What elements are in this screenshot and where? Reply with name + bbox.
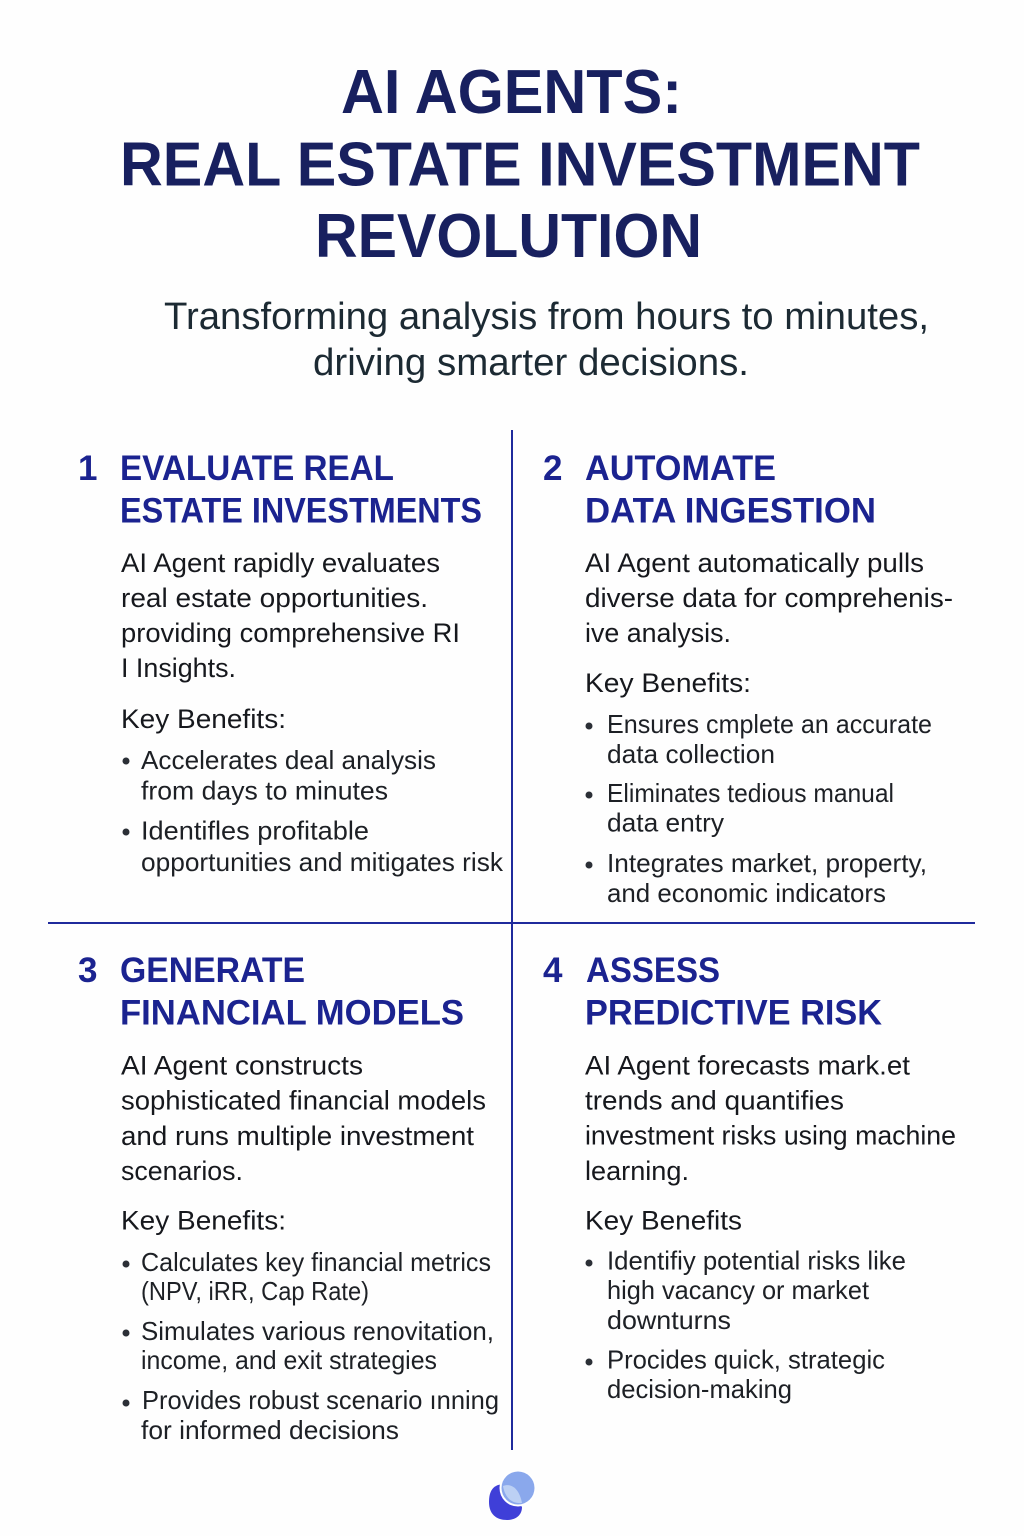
- benefits list: high vacancy or market: [607, 1275, 870, 1305]
- description: AI Agent automatically pulls: [585, 548, 924, 578]
- benefits list: [122, 745, 504, 877]
- subtitle: [164, 296, 929, 384]
- heading: evaluate: ESTATE INVESTMENTS: [120, 492, 482, 530]
- number 2: 2: [543, 449, 562, 488]
- benefits list: opportunities and mitigates risk: [141, 847, 504, 877]
- benefits list: Identifles profitable: [141, 816, 369, 846]
- description: scenarios.: [121, 1156, 243, 1186]
- heading: assess: PREDICTIVE RISK: [585, 994, 882, 1032]
- description: sophisticated financial models: [121, 1086, 486, 1116]
- benefits list: (NPV, iRR, Cap Rate): [141, 1276, 369, 1306]
- title: REAL ESTATE INVESTMENT: [120, 130, 920, 200]
- title: [120, 58, 920, 271]
- heading: automate: AUTOMATE: [585, 449, 776, 488]
- panel: evaluate real estate investments: [78, 449, 504, 877]
- title: REVOLUTION: [315, 202, 702, 271]
- benefits list: and economic indicators: [607, 878, 886, 908]
- description: [121, 1050, 486, 1186]
- panel: automate data ingestion: [543, 449, 953, 908]
- description: [585, 1050, 956, 1186]
- benefits list: Calculates key financial metrics: [141, 1247, 491, 1277]
- key benefits label: Key Benefits:: [121, 704, 286, 734]
- heading: evaluate: EVALUATE REAL: [120, 449, 394, 488]
- panel: generate financial models: [78, 951, 499, 1445]
- title: AI AGENTS:: [341, 58, 682, 127]
- description: I Insights.: [121, 653, 236, 683]
- heading: automate: [585, 449, 876, 530]
- benefits list: [586, 1246, 906, 1404]
- description: providing comprehensive RI: [121, 618, 460, 648]
- number 3: 3: [78, 951, 97, 990]
- subtitle: driving smarter decisions.: [313, 342, 749, 384]
- heading: automate: DATA INGESTION: [585, 492, 876, 530]
- heading: evaluate: [120, 449, 482, 530]
- description: real estate opportunities.: [121, 583, 428, 613]
- heading: assess: [585, 951, 882, 1032]
- benefits list: data collection: [607, 739, 775, 769]
- subtitle: Transforming analysis from hours to minutes,: [164, 296, 929, 338]
- description: and runs multiple investment: [121, 1121, 475, 1151]
- heading: generate: [120, 951, 464, 1032]
- horizontal divider: [48, 922, 975, 924]
- description: investment risks using machine: [585, 1120, 956, 1150]
- heading: assess: ASSESS: [586, 951, 720, 990]
- vertical divider: [511, 430, 513, 1450]
- benefits list: Identifiy potential risks like: [607, 1246, 906, 1276]
- benefits list: downturns: [607, 1305, 731, 1335]
- benefits list: Integrates market, property,: [607, 848, 927, 878]
- benefits list: [586, 709, 932, 908]
- benefits list: for informed decisions: [141, 1415, 399, 1445]
- description: [585, 548, 953, 648]
- icon: logo: [489, 1470, 536, 1520]
- number 4: 4: [543, 951, 563, 990]
- description: AI Agent forecasts mark.et: [585, 1050, 910, 1080]
- key benefits label: Key Benefits:: [121, 1206, 286, 1236]
- description: AI Agent rapidly evaluates: [121, 548, 440, 578]
- benefits list: [122, 1247, 499, 1445]
- description: [121, 548, 460, 683]
- benefits list: Simulates various renovitation,: [141, 1316, 494, 1346]
- benefits list: Ensures cmplete an accurate: [607, 709, 932, 739]
- benefits list: data entry: [607, 808, 724, 838]
- heading: generate: GENERATE: [120, 951, 305, 990]
- benefits list: income, and exit strategies: [141, 1345, 437, 1375]
- key benefits label: Key Benefits:: [585, 668, 751, 698]
- benefits list: decision-making: [607, 1374, 792, 1404]
- panel: assess predictive risk: [543, 951, 956, 1404]
- heading: generate: FINANCIAL MODELS: [120, 994, 464, 1032]
- number 1: 1: [78, 449, 97, 488]
- description: diverse data for comprehenis-: [585, 583, 953, 613]
- key benefits label: Key Benefits: [585, 1206, 742, 1236]
- benefits list: Provides robust scenario ınning: [142, 1385, 499, 1415]
- description: trends and quantifies: [585, 1086, 844, 1116]
- benefits list: Eliminates tedious manual: [607, 778, 894, 808]
- benefits list: Procides quick, strategic: [607, 1344, 885, 1374]
- description: ive analysis.: [585, 618, 731, 648]
- benefits list: Accelerates deal analysis: [141, 745, 436, 775]
- description: learning.: [585, 1156, 689, 1186]
- benefits list: from days to minutes: [141, 776, 388, 806]
- description: AI Agent constructs: [121, 1050, 363, 1080]
